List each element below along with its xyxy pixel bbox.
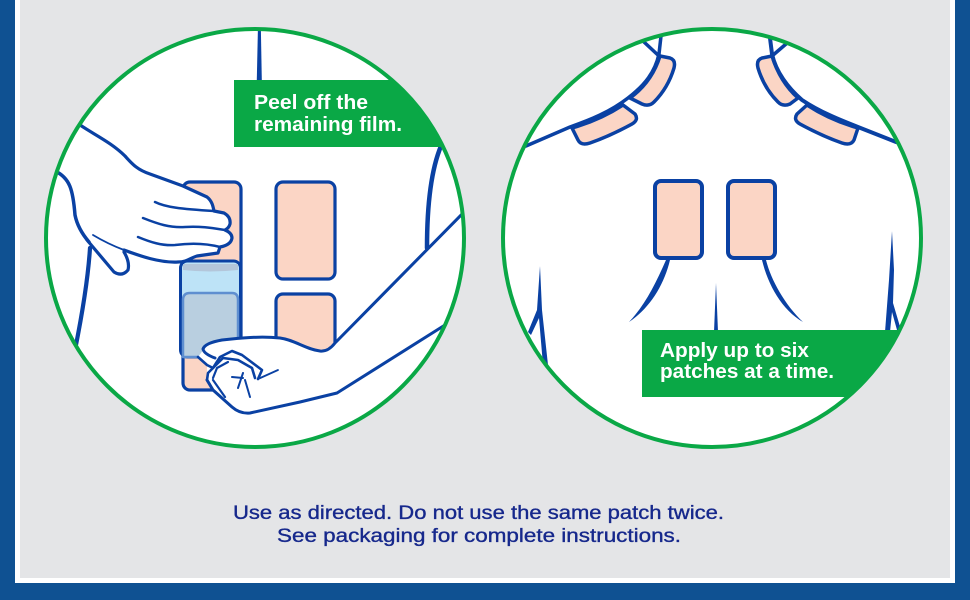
spine and back contours: [528, 231, 901, 365]
right shoulder patches: [758, 56, 858, 144]
label: apply up to six patches: [642, 330, 898, 397]
footnote text: Use as directed. Do not use the same patch twice.: [233, 503, 724, 524]
footnote text: See packaging for complete instructions.: [277, 526, 681, 547]
left shoulder patches: [572, 56, 674, 144]
label: peel off the remaining film: [234, 80, 441, 147]
ring: left circle: [46, 29, 464, 447]
lower arm and hand: [198, 206, 470, 413]
center patches: [655, 181, 775, 258]
label: peel off the remaining film: Peel off the: [254, 92, 368, 114]
label: peel off the remaining film: remaining film.: [254, 114, 402, 136]
ring: right circle: [503, 29, 921, 447]
shoulder lines: [526, 36, 896, 146]
upper hand: [80, 125, 232, 274]
peeled film: [180, 261, 240, 357]
panel: peel off film circle: [46, 25, 470, 447]
body outline lines: [55, 25, 441, 350]
label: apply up to six patches: Apply up to six: [660, 340, 809, 362]
label: apply up to six patches: patches at a time.: [660, 361, 834, 383]
footnote text: [233, 503, 724, 547]
patches on back: [183, 182, 335, 390]
panel: back with six patches circle: [503, 29, 921, 447]
